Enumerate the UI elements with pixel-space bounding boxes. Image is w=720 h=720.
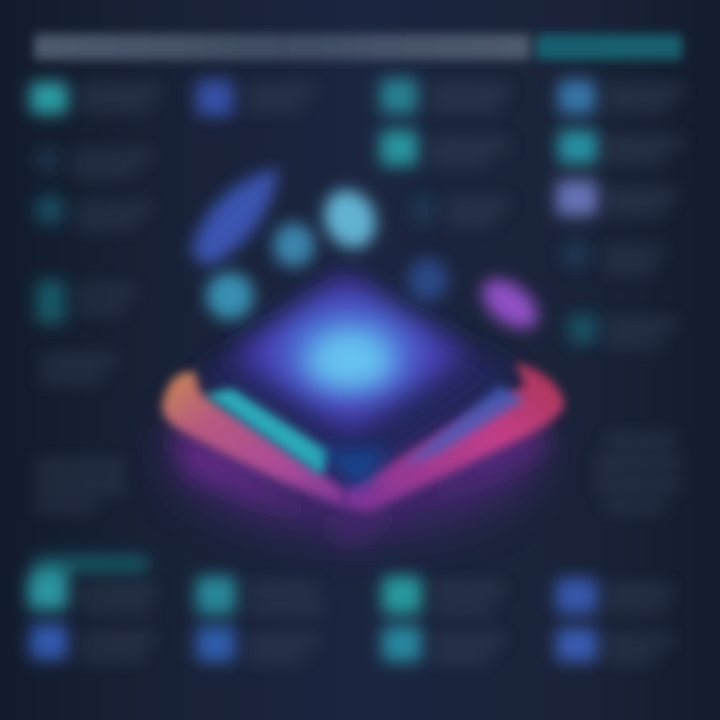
central diamond <box>230 272 470 435</box>
fourth column icons <box>556 80 598 662</box>
tray glow <box>170 380 540 530</box>
tray purple underside <box>170 425 550 540</box>
shape: small teal gem <box>273 223 315 267</box>
text placeholders <box>36 86 682 662</box>
second column icons <box>196 80 236 662</box>
title bar <box>34 34 682 60</box>
shape: large blue leaf <box>192 168 278 265</box>
tray left rim <box>162 372 345 508</box>
third column icons <box>380 78 436 662</box>
shape: teal gem <box>206 272 254 320</box>
tray bottom core <box>320 450 390 490</box>
tray inner blue edge <box>400 385 525 468</box>
tray right rim <box>345 362 565 512</box>
left column icons <box>28 82 148 660</box>
shape: light blue gem <box>315 181 385 257</box>
shape: dim blue gem <box>408 258 448 302</box>
central illustration <box>162 272 565 540</box>
shape: purple gem <box>473 269 547 339</box>
tray dark interior <box>195 285 525 485</box>
diamond highlight <box>308 336 392 388</box>
tray teal edge <box>205 388 330 476</box>
floating shapes <box>192 168 547 339</box>
